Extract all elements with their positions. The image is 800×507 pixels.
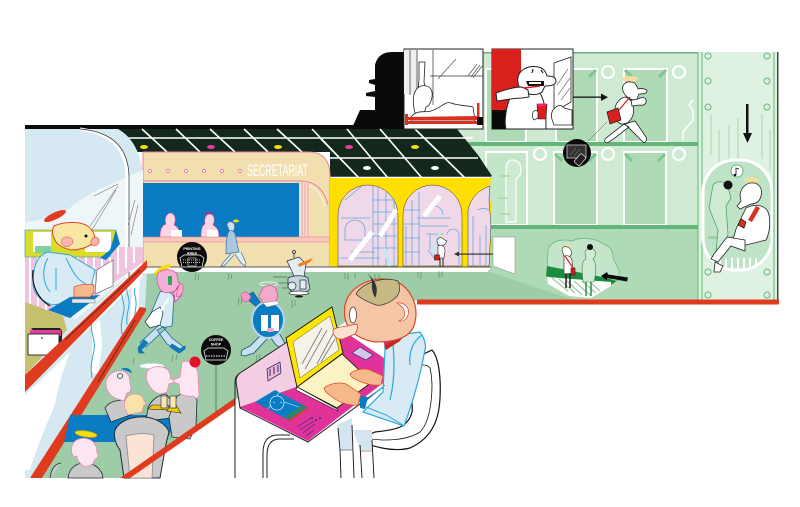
red halo (43, 208, 67, 224)
tablet (255, 390, 308, 422)
city line art in arches (340, 186, 489, 266)
white cloud (25, 170, 143, 320)
grass tufts (133, 271, 442, 364)
foreground: hands (324, 369, 383, 405)
foreground: collar and tie (382, 330, 403, 350)
receptionists (160, 212, 219, 237)
green office building (405, 52, 778, 300)
red divider: booth floor (25, 260, 147, 392)
bottom red band (417, 300, 779, 304)
bed frame (405, 103, 480, 125)
roof lights (140, 145, 439, 170)
yellow arcade (330, 178, 492, 268)
sleeping man with halo (50, 429, 103, 478)
badge: monitor and phone (563, 139, 591, 167)
roof (118, 129, 492, 180)
rivets (705, 53, 770, 298)
hair (356, 279, 400, 305)
head (518, 67, 556, 95)
sign dots (149, 170, 241, 172)
porthole windows (534, 66, 685, 160)
red divider: floor edge (120, 398, 235, 478)
floor (42, 266, 574, 478)
glasses (350, 307, 356, 323)
woman walking with bag (138, 264, 185, 353)
phone on desk (352, 347, 373, 360)
baby (124, 394, 146, 415)
badge: printing area: PRINTING (183, 247, 201, 251)
yellow drinks (148, 396, 181, 413)
lower window, blue-white wavy (25, 272, 147, 478)
arch frame (80, 129, 127, 277)
power socket (267, 362, 281, 381)
striped wall (25, 247, 143, 318)
reflection streaks (350, 196, 440, 260)
small man with red bag (434, 235, 447, 267)
blue table (64, 415, 180, 442)
customer seen from behind (114, 417, 169, 478)
ear (397, 303, 408, 321)
man in blue carrying book (241, 282, 287, 356)
white door (493, 237, 515, 274)
counter (143, 237, 330, 242)
man with red bag waiting (562, 244, 575, 288)
leader line to monitor badge (581, 122, 607, 148)
blue service window (143, 183, 299, 237)
comic panel: brushing teeth (492, 49, 573, 129)
arm with toothbrush (496, 87, 529, 101)
badge: printing area (177, 242, 207, 272)
hair curl (367, 273, 377, 298)
man walking with red bag (605, 76, 647, 143)
elevator shaft (698, 52, 778, 300)
ghost figure in doorway (498, 160, 521, 222)
foreground: trousers (337, 418, 374, 478)
motion lines (711, 114, 770, 175)
foreground: desk (235, 332, 390, 478)
blue desk (48, 295, 100, 318)
music note bubble (731, 165, 743, 177)
coffee shop group (50, 356, 200, 478)
arrow: elevator going down (743, 104, 752, 143)
raised arm (418, 62, 426, 91)
mirror (554, 57, 571, 112)
foreground: chair (358, 350, 440, 450)
wavy white strip (143, 267, 490, 274)
torso (505, 93, 546, 129)
archive box (28, 328, 62, 356)
purple notes (297, 417, 321, 436)
skylight grid (124, 129, 490, 178)
man walking past counter (221, 220, 246, 266)
hands (74, 284, 94, 297)
nose (333, 324, 357, 339)
ghost figure at elevator (683, 100, 693, 140)
arrow: towards small man (454, 252, 495, 256)
upper floor doors (486, 69, 667, 142)
foreground: laptop (286, 307, 372, 411)
yellow desk panel (25, 230, 116, 257)
foreground: jacket (360, 332, 425, 426)
door chevrons (555, 70, 666, 161)
badge: coffee shop: COFFEE (209, 338, 224, 342)
arrow: towards waiting group (601, 272, 628, 282)
badge: coffee shop: SHOP (211, 342, 222, 346)
waiting area group (546, 238, 619, 298)
badge: coffee shop (201, 335, 231, 412)
left booth window (25, 129, 143, 375)
woman with red hat (169, 356, 200, 439)
back green mound (90, 395, 200, 440)
secretariat frontage (143, 152, 330, 268)
red cup (537, 104, 547, 119)
sleeper head (413, 86, 432, 114)
corridor floor lines (467, 142, 698, 229)
arrow: bathroom to corridor (573, 94, 608, 101)
middle floor doors (486, 152, 666, 225)
top black roof bar (25, 125, 357, 129)
badge: printing area: AREA (187, 252, 197, 256)
lower floor (488, 229, 698, 300)
woman behind (709, 182, 731, 252)
desk leg (263, 435, 294, 478)
desk back panel (236, 342, 298, 408)
elevator capsule (703, 160, 772, 272)
blanket (411, 103, 475, 121)
foreground: head (333, 273, 416, 342)
black silhouette behind comics (352, 52, 412, 132)
olive floor (25, 302, 67, 375)
seated man reading phone (711, 178, 770, 272)
striped column (299, 183, 310, 237)
worker at laptop (33, 222, 113, 318)
desk top (240, 332, 390, 441)
sign text: SECRETARIAT (247, 161, 308, 180)
man with glasses (105, 368, 133, 422)
woman waiting, green (582, 248, 596, 296)
person with halo (140, 364, 176, 421)
red divider: window ledge (30, 307, 146, 478)
laptop (95, 260, 113, 294)
robot with carrot nose (273, 250, 313, 298)
sink (551, 106, 572, 125)
comic panel: waking up in bed (404, 49, 483, 129)
arch interiors (338, 185, 398, 266)
